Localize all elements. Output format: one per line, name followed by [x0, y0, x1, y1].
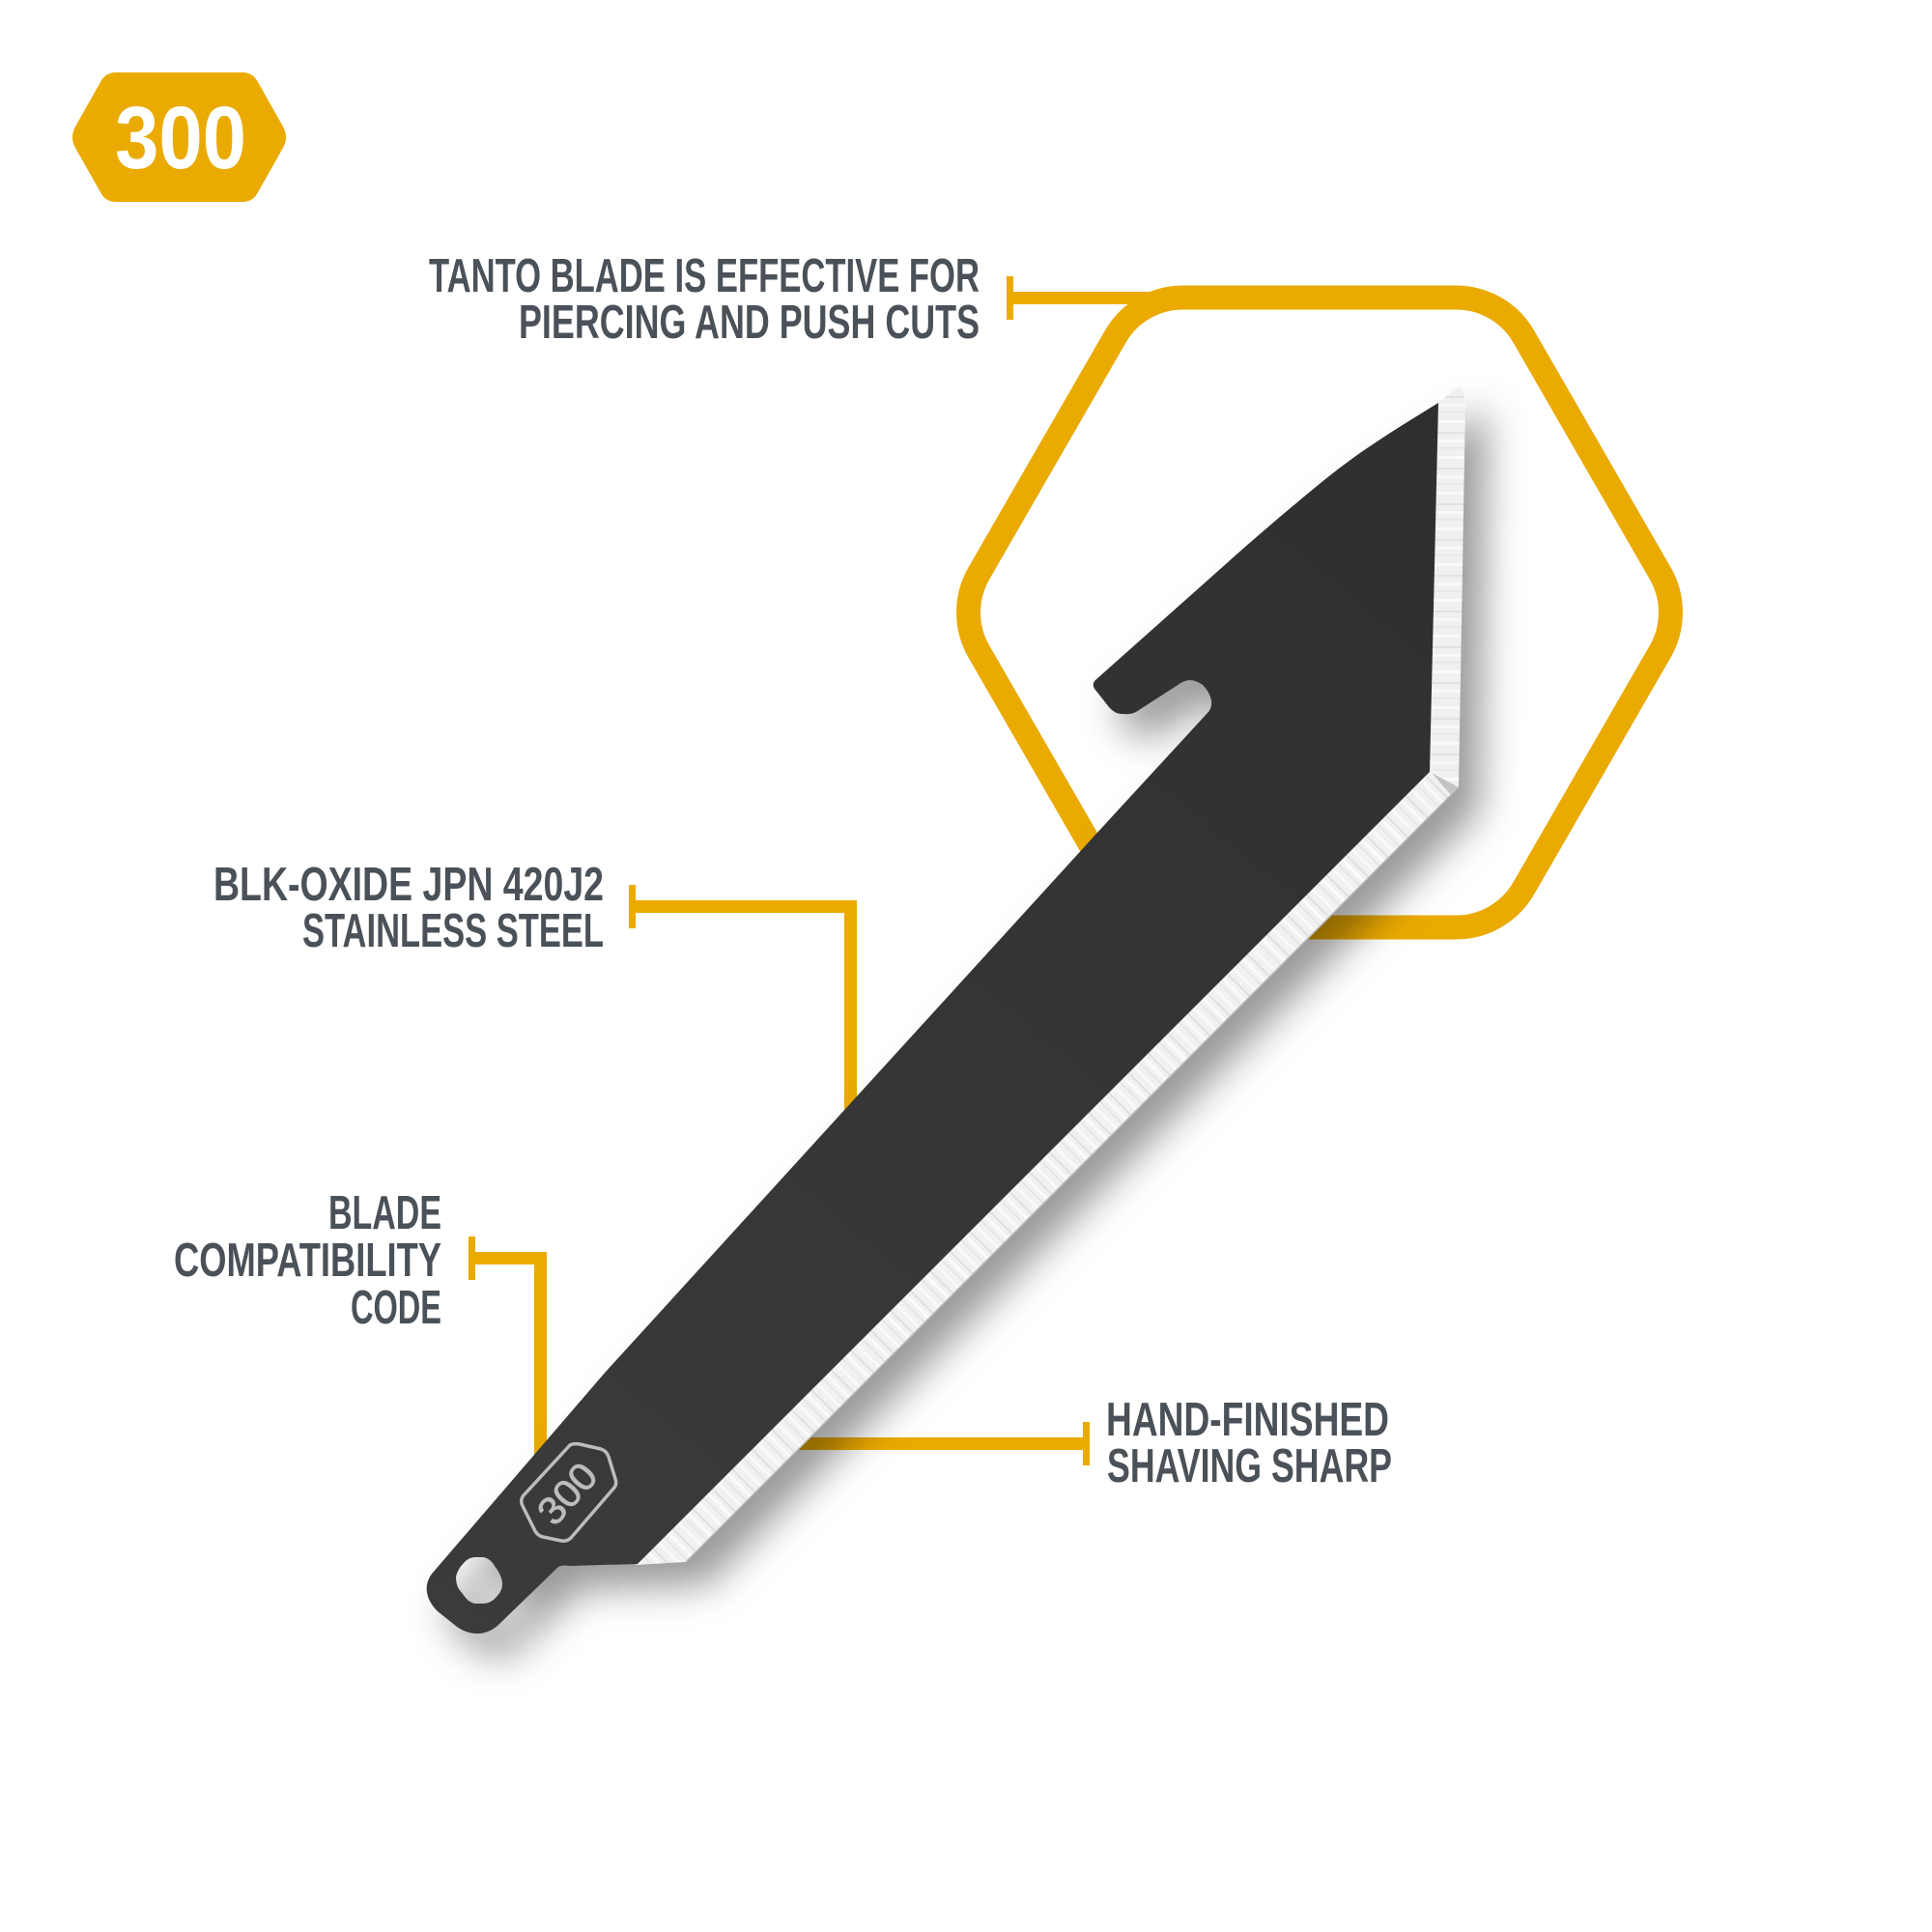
callout text: steel [213, 859, 604, 957]
callout text: steel: STAINLESS STEEL [302, 905, 604, 957]
leader line: compatibility code [469, 1236, 547, 1468]
callout text: shaving sharp: HAND-FINISHED [1106, 1394, 1389, 1446]
blade compatibility code engraving: 300 [529, 1455, 607, 1533]
leader line: steel [629, 885, 857, 1122]
callout text: compatibility code: CODE [351, 1282, 441, 1334]
large hexagon outline [969, 298, 1670, 927]
callout text: steel: BLK-OXIDE JPN 420J2 [213, 859, 604, 911]
cutting edge: tip bevel [1428, 384, 1465, 787]
callout text: tanto blade: PIERCING AND PUSH CUTS [519, 297, 980, 349]
cutting edge: long bevel [636, 770, 1459, 1565]
outer edge line [686, 795, 1451, 1562]
callout text: shaving sharp: SHAVING SHARP [1107, 1440, 1392, 1492]
badge: 300 [72, 72, 286, 202]
badge: 300: 300 [115, 89, 246, 187]
callout text: compatibility code [174, 1187, 441, 1334]
blade [427, 384, 1465, 1634]
callout text: compatibility code: COMPATIBILITY [174, 1235, 441, 1287]
callout text: tanto blade [429, 250, 980, 349]
edge facet [1432, 773, 1459, 795]
leader line: tanto blade [1007, 276, 1157, 320]
leader line: shaving sharp [782, 1422, 1090, 1465]
callout text: tanto blade: TANTO BLADE IS EFFECTIVE FOR [429, 250, 980, 302]
callout text: compatibility code: BLADE [328, 1187, 441, 1239]
blade drop shadow [448, 407, 1487, 1657]
blade body [427, 403, 1438, 1634]
callout text: shaving sharp [1106, 1394, 1392, 1492]
blade compatibility code engraving [522, 1444, 616, 1541]
